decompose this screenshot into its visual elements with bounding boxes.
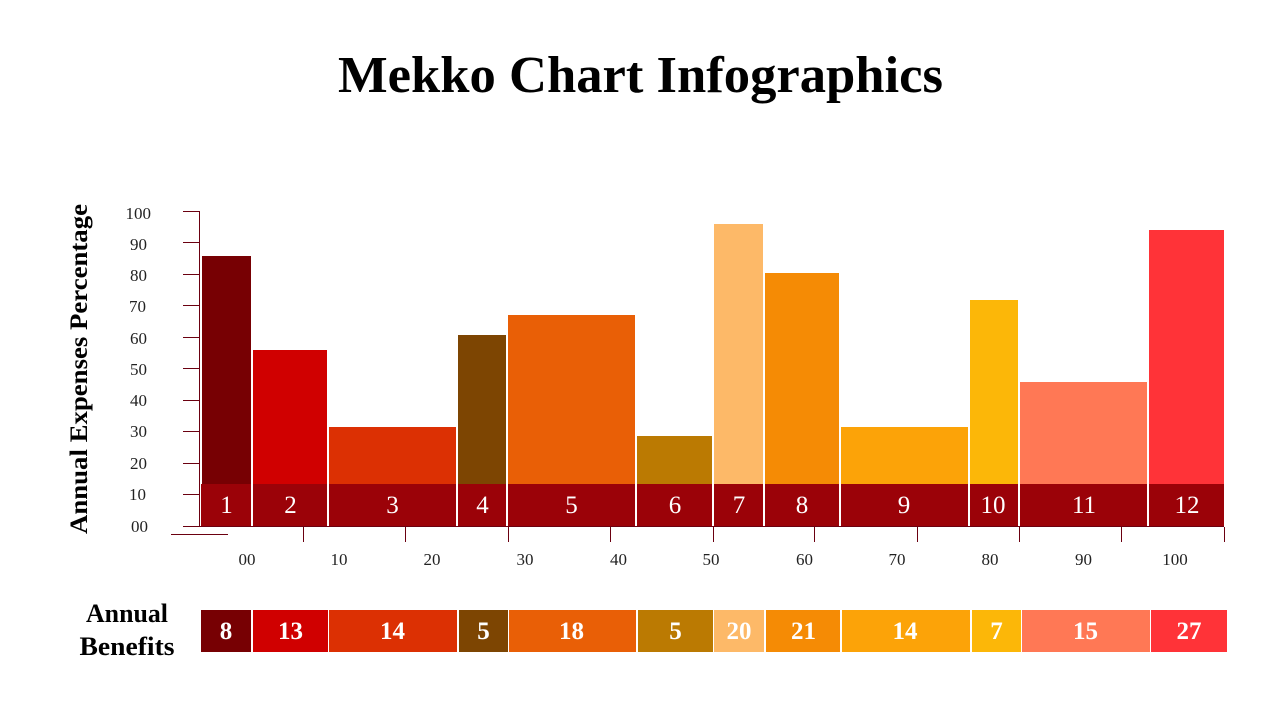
annual benefits strip: 21 [791,618,816,645]
y axis labels: 90 [130,235,147,254]
category band: 1 [220,492,233,519]
x axis labels: 40 [610,550,627,569]
annual benefits strip: 14 [892,618,918,645]
category band: 11 [1072,492,1096,519]
x axis labels: 00 [238,550,256,569]
category band: 6 [669,492,681,519]
y axis labels [126,204,151,536]
category band: 10 [980,492,1006,519]
y axis labels: 100 [126,204,151,223]
annual benefits strip: 5 [477,618,490,645]
category band: 2 [284,492,297,519]
y axis [183,211,1224,526]
x axis labels: 20 [424,550,440,569]
category band [201,484,1224,526]
mekko bars [202,224,1224,484]
x axis labels: 10 [330,550,348,569]
annual benefits strip: 18 [559,618,584,645]
y axis labels: 30 [130,422,147,441]
annual benefits label: Annual [86,599,168,628]
x axis labels: 70 [888,550,906,569]
x axis labels [238,550,1188,569]
annual benefits strip: 8 [220,618,232,645]
y axis labels: 40 [130,391,147,410]
annual benefits strip: 14 [380,618,406,645]
annual benefits label: Benefits [80,632,174,661]
category band: 12 [1174,492,1200,519]
category band: 5 [565,492,578,519]
annual benefits strip: 5 [669,618,682,645]
x axis labels: 30 [516,550,534,569]
x axis labels: 50 [702,550,720,569]
annual benefits strip: 7 [990,618,1003,645]
annual benefits strip: 27 [1176,618,1202,645]
y axis labels: 20 [130,454,147,473]
x axis labels: 100 [1162,550,1188,569]
category band: 8 [796,492,808,519]
x axis labels: 80 [982,550,998,569]
y axis labels: 50 [130,360,147,379]
y axis labels: 80 [130,266,147,285]
annual benefits strip [201,610,1227,652]
y axis labels: 60 [130,329,147,348]
y axis labels: 00 [131,517,148,536]
category band: 9 [898,492,910,519]
category band: 4 [476,492,489,519]
y axis title: Annual Expenses Percentage [66,204,93,534]
annual benefits label [80,599,174,661]
x axis labels: 60 [796,550,813,569]
title: Mekko Chart Infographics [338,47,943,104]
x axis labels: 90 [1075,550,1092,569]
category band: 3 [386,492,399,519]
x axis ticks [171,527,1224,542]
y axis labels: 10 [129,485,146,504]
annual benefits strip: 15 [1073,618,1098,645]
category band: 7 [733,492,745,519]
annual benefits strip: 20 [726,618,752,645]
y axis labels: 70 [129,297,146,316]
annual benefits strip: 13 [278,618,303,645]
